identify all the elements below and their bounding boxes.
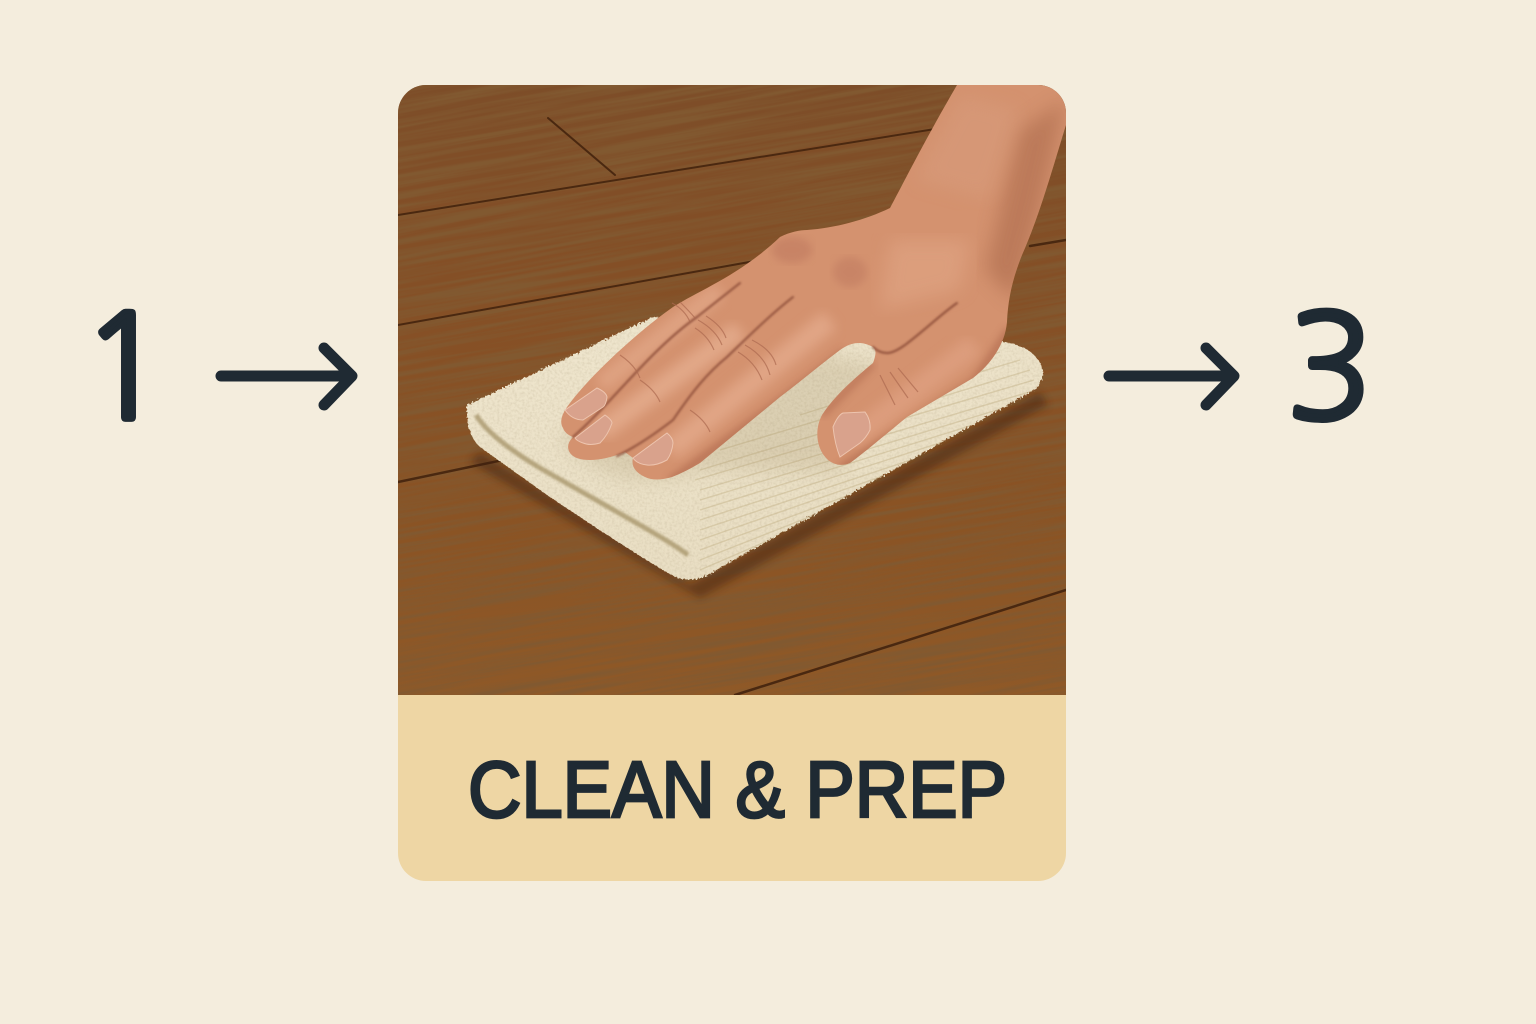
caption: clean and prep: CLEAN & PREP bbox=[468, 745, 1007, 834]
finger separators bbox=[573, 283, 957, 456]
arrow: card to step 3 bbox=[1109, 348, 1234, 405]
microfibre towel bbox=[460, 310, 1050, 585]
hand shading bbox=[600, 95, 1066, 482]
wood floor bbox=[398, 85, 1066, 695]
step number 3: 3 bbox=[1286, 295, 1374, 440]
fold shadows bbox=[476, 415, 688, 555]
arrow: step 1 to card bbox=[221, 348, 352, 405]
panel: step 2 card bbox=[398, 85, 1066, 881]
caption band bbox=[398, 695, 1066, 881]
hand bbox=[561, 85, 1075, 482]
towel shadow bbox=[470, 392, 1048, 598]
knuckle shading bbox=[774, 238, 811, 262]
hand silhouette bbox=[561, 85, 1075, 480]
photo: wiping wood floor bbox=[398, 85, 1066, 695]
fingernails bbox=[565, 388, 870, 465]
step number 1: 1 bbox=[80, 295, 168, 440]
finger joints bbox=[620, 302, 918, 432]
